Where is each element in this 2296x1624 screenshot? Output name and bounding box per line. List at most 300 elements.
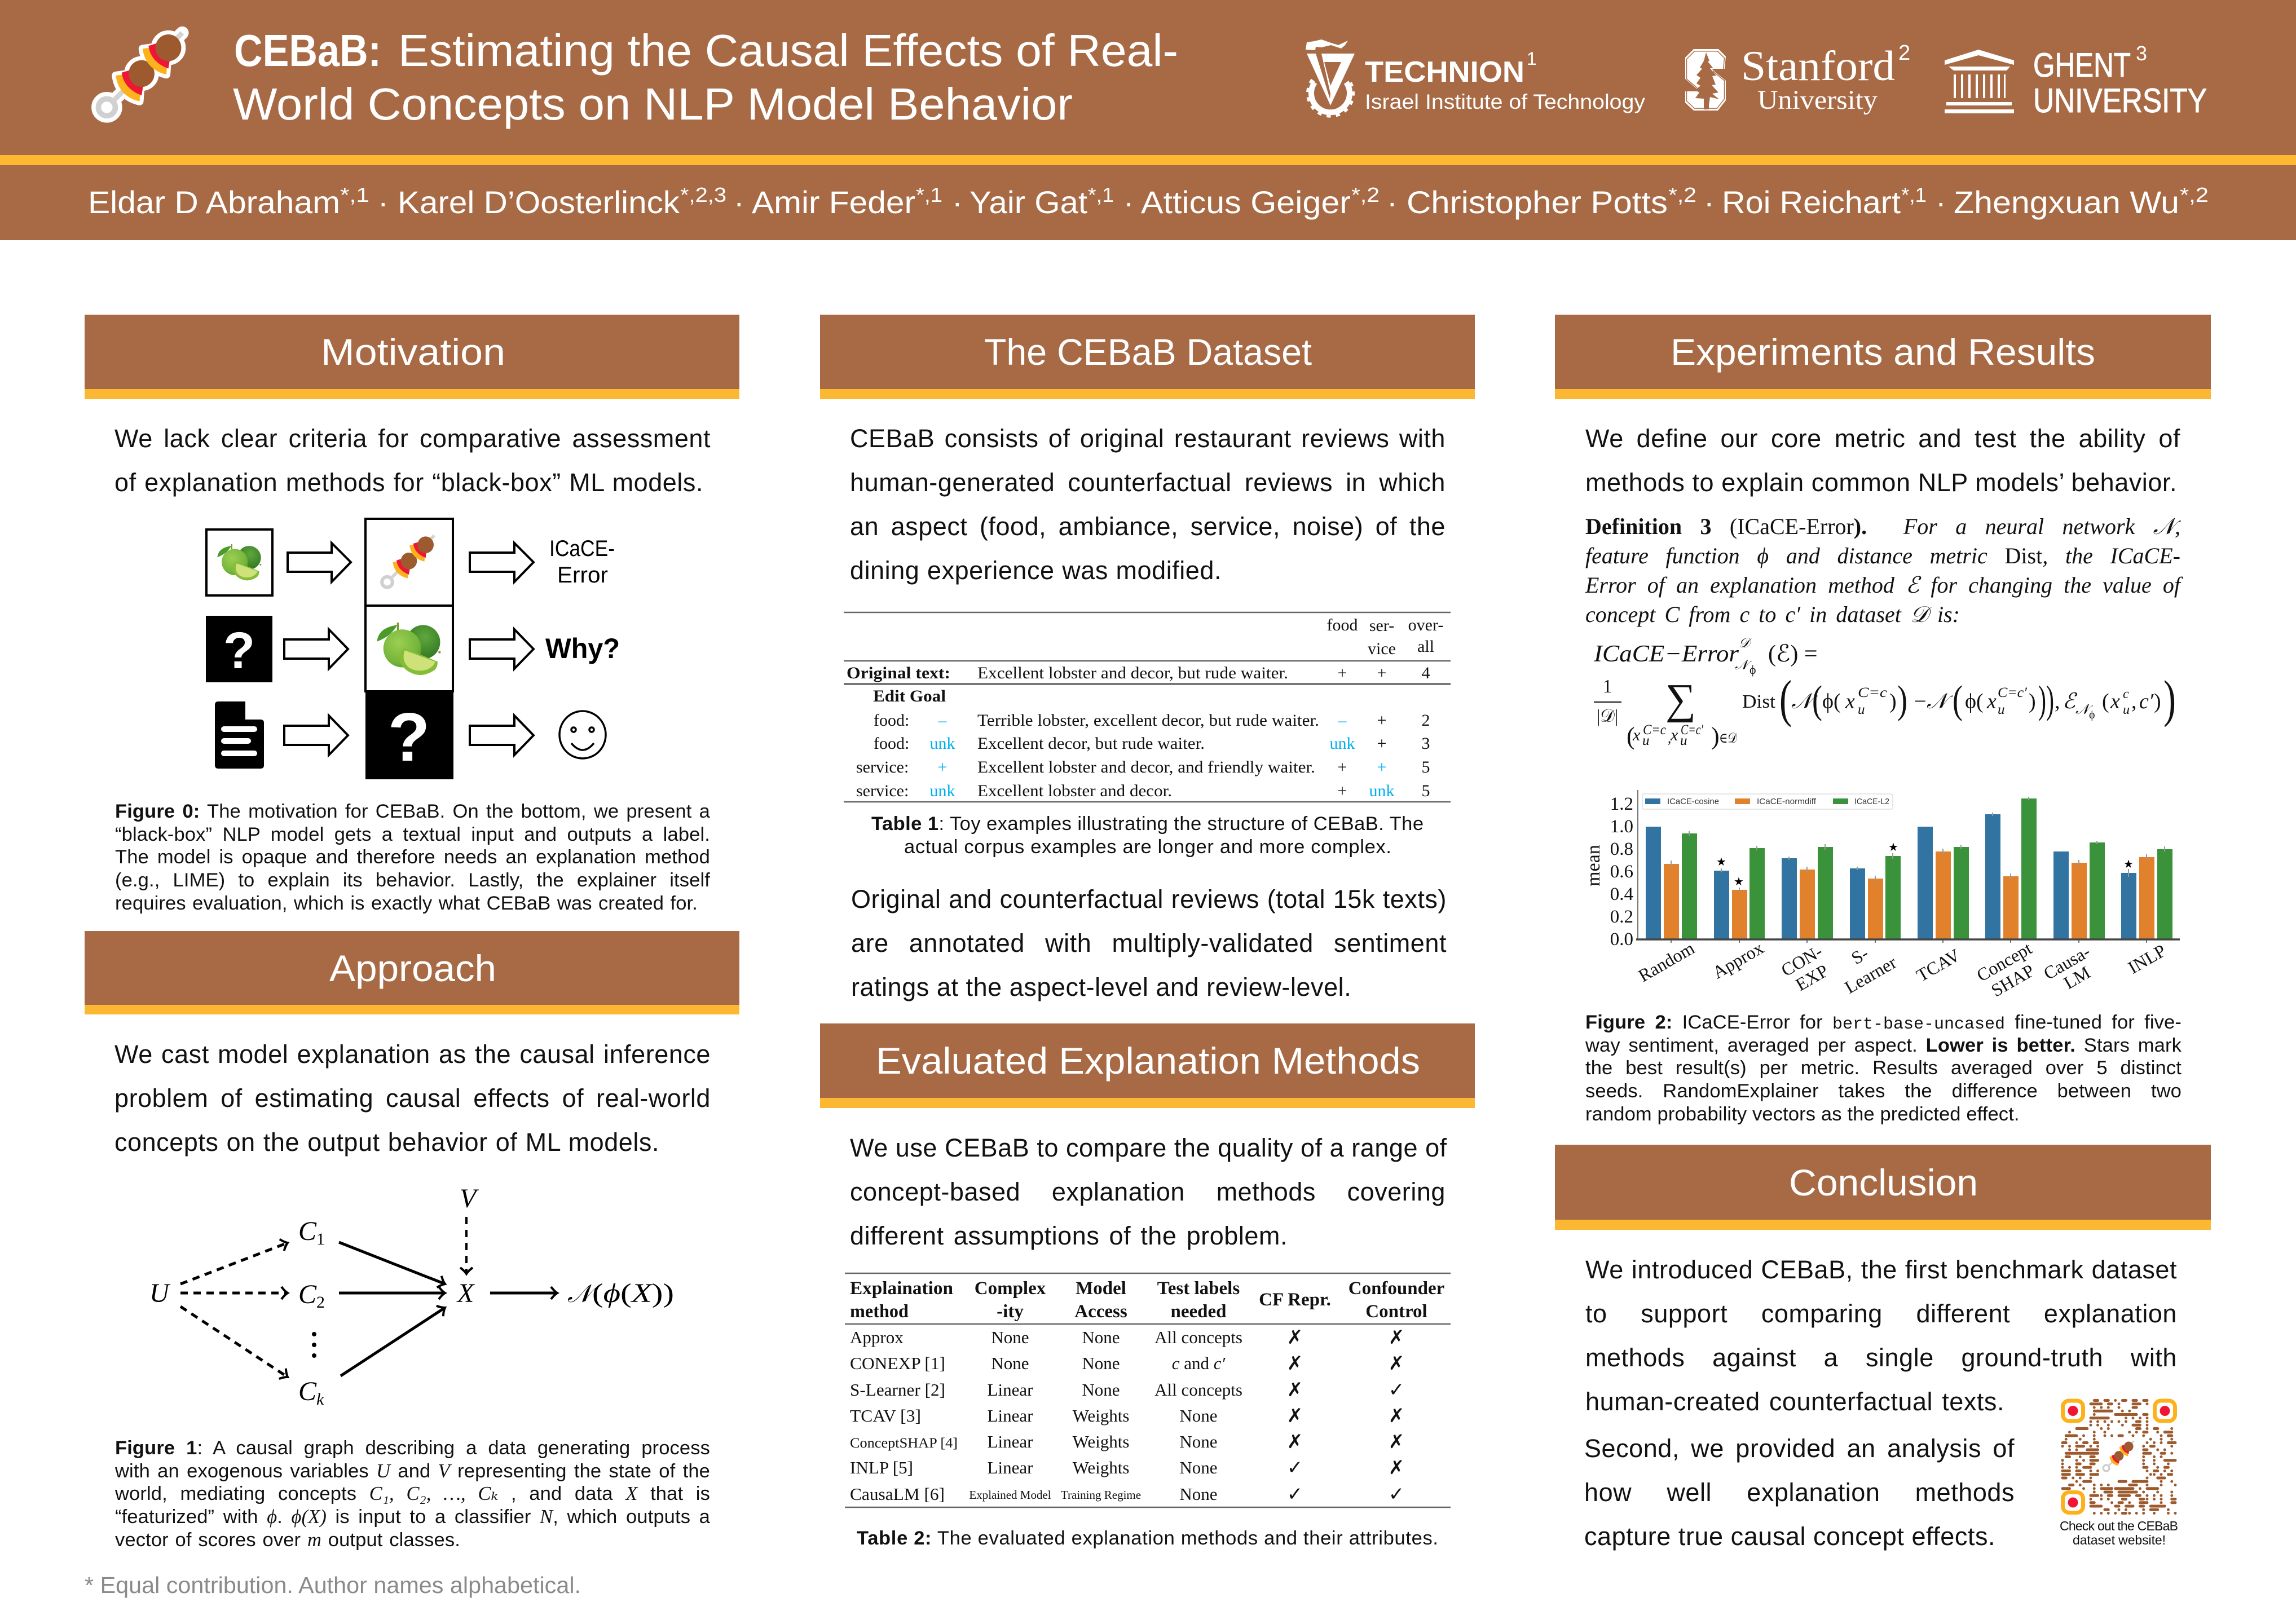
formula body: 𝒩	[1791, 690, 1818, 713]
y-axis ticks: 1.0	[1610, 817, 1633, 837]
table 2 attribute columns: Training Regime	[1061, 1488, 1141, 1502]
logo: Stanford	[1685, 41, 1910, 115]
text: experiments intro: methods to explain common NLP models’ behavior.	[1585, 468, 2177, 497]
heading: The CEBaB Dataset: The CEBaB Dataset	[984, 331, 1312, 373]
table 2 check marks: ✗	[1287, 1326, 1303, 1349]
table 2 header: CF Repr.	[1259, 1290, 1331, 1310]
icon: lime input	[206, 529, 272, 595]
text: dataset annotation: ratings at the aspect-level and review-level.	[851, 973, 1351, 1001]
icon: black box model	[365, 691, 453, 779]
table 2 check marks: ✗	[1287, 1352, 1303, 1375]
table 1 edit goal rows: Excellent lobster and decor.	[977, 782, 1172, 800]
x-axis labels: LM	[2060, 962, 2094, 993]
authors band: ·	[1704, 184, 1715, 220]
table 1 edit goal rows: Excellent lobster and decor, and friendly waiter.	[977, 758, 1315, 776]
text: approach	[114, 1040, 711, 1157]
icon: lime box	[365, 606, 453, 691]
table 2 header: Complex	[975, 1278, 1046, 1299]
text: dataset description: an aspect (food, ambiance, service, noise) of the	[850, 512, 1446, 541]
table 1 original row	[847, 664, 1430, 682]
x-axis labels: EXP	[1792, 960, 1832, 995]
formula body: (	[2102, 690, 2109, 713]
table 2 attribute columns: None	[1082, 1327, 1120, 1347]
formula body: ,	[2055, 690, 2060, 713]
table 2 check marks: ✓	[1287, 1457, 1303, 1479]
table 2 attribute columns: None	[1082, 1380, 1120, 1400]
formula: ICaCE-Error	[1593, 636, 2176, 750]
table 2 check marks	[1287, 1326, 1404, 1506]
formula body: ϕ	[2089, 709, 2095, 721]
icon: smiley	[559, 711, 606, 758]
table 2 header: Model	[1076, 1278, 1126, 1299]
QR modules	[2063, 1401, 2175, 1513]
caption: figure 1: vector of scores over m output classes.	[115, 1529, 460, 1551]
graph nodes: 𝒩	[567, 1280, 598, 1308]
table 2 attribute columns: Explained Model	[969, 1488, 1051, 1502]
formula sum range: ∈𝒟	[1719, 731, 1737, 746]
formula sum range: ,	[1668, 731, 1671, 746]
table 1 original row: +	[1338, 664, 1347, 682]
text: conclusion second: Second, we provided an analysis of	[1584, 1434, 2015, 1463]
authors band: *,1	[340, 183, 369, 206]
authors band: *,2	[1351, 183, 1380, 206]
text: conclusion first: We introduced CEBaB, the first benchmark dataset	[1585, 1255, 2177, 1284]
caption: figure 2: way sentiment, averaged per aspect. Lower is better. Stars mark	[1585, 1035, 2182, 1056]
table 1 edit goal rows: 5	[1421, 782, 1430, 800]
table 2 attribute columns: None	[1179, 1458, 1218, 1477]
table 2 check marks: ✗	[1389, 1431, 1404, 1453]
table 2 attribute columns: Linear	[988, 1458, 1033, 1477]
formula body: )	[1889, 690, 1897, 713]
x-axis labels: SHAP	[1987, 960, 2038, 1001]
table 2 header: needed	[1171, 1301, 1226, 1322]
table 2 attribute columns: c and c′	[1172, 1353, 1226, 1373]
authors band: *,2,3	[680, 183, 726, 206]
icon: document	[215, 701, 264, 769]
table 2 attribute columns: Weights	[1073, 1458, 1129, 1477]
caption: figure 1: “featurized” with ϕ. ϕ(X) is input to a classifier N, which outputs a	[115, 1506, 710, 1528]
text: conclusion first: methods against a single ground-truth with	[1585, 1343, 2177, 1372]
formula body: (	[1812, 678, 1822, 722]
title: Estimating the Causal Effects of Real-	[398, 25, 1178, 76]
heading: Motivation: Motivation	[321, 331, 505, 373]
formula body	[1742, 670, 2176, 727]
bars: S-Learner	[1850, 856, 1901, 939]
y-axis label: mean	[1583, 845, 1604, 886]
table 2 caption: Table 2: The evaluated explanation methods and their attributes.	[857, 1528, 1438, 1549]
chart axes	[1636, 790, 2180, 943]
stars: best results	[1716, 840, 2134, 888]
authors band: *,1	[1901, 183, 1927, 206]
formula body: )	[2154, 690, 2161, 713]
title: World Concepts on NLP Model Behavior	[233, 79, 1073, 129]
formula body: c	[2123, 687, 2129, 701]
footnote: * Equal contribution. Author names alphabetical.	[85, 1572, 581, 1598]
y-axis ticks	[1610, 794, 1633, 950]
graph nodes: X	[456, 1278, 475, 1308]
table 2 check marks: ✗	[1287, 1379, 1303, 1401]
table 2 method column: TCAV [3]	[850, 1406, 921, 1426]
table 2 method column: CONEXP [1]	[850, 1353, 945, 1373]
formula first line: 𝒟	[1739, 636, 1752, 651]
caption: figure 0: “black-box” NLP model gets a textual input and outputs a label.	[115, 824, 710, 845]
icon: kebab in QR	[2102, 1441, 2134, 1472]
icon: black box row two	[206, 616, 272, 682]
y-axis ticks: 0.8	[1610, 839, 1633, 859]
x-axis labels: CON-	[1778, 941, 1826, 981]
formula fraction: 1	[1603, 676, 1612, 697]
authors band: ·	[952, 184, 963, 220]
table 2 header: Access	[1074, 1301, 1127, 1322]
table 2 check marks: ✗	[1389, 1457, 1404, 1479]
authors band: Zhengxuan Wu	[1954, 184, 2179, 220]
text: conclusion second: capture true causal concept effects.	[1584, 1522, 1995, 1551]
text: conclusion first: human-created counterfactual texts.	[1585, 1387, 2004, 1416]
logo: Ghent University: UNIVERSITY	[2033, 82, 2207, 120]
text: approach: concepts on the output behavior of ML models.	[114, 1128, 659, 1157]
chart legend: ICaCE-cosine	[1667, 797, 1719, 806]
table 1 original row: +	[1377, 664, 1386, 682]
x-axis labels: S-	[1848, 943, 1872, 968]
text: conclusion second	[1584, 1434, 2015, 1551]
authors band: Amir Feder	[752, 184, 915, 220]
table 2 header	[850, 1278, 1444, 1322]
table 1 edit goal rows	[856, 687, 1430, 800]
title	[233, 25, 1178, 129]
formula first line: 𝒩	[1735, 658, 1752, 673]
text: conclusion first	[1585, 1255, 2177, 1416]
logo: Ghent University	[1945, 42, 2207, 120]
heading: Experiments and Results: Experiments and Results	[1671, 331, 2095, 373]
formula body: (	[1779, 670, 1792, 727]
table 2 header: method	[850, 1301, 909, 1322]
text: motivation intro: We lack clear criteria for comparative assessment	[114, 424, 711, 453]
text: evaluated methods	[850, 1133, 1447, 1250]
heading: Conclusion	[1555, 1145, 2211, 1230]
figure 1: causal graph	[149, 1184, 674, 1409]
text: definition 3: feature function ϕ and distance metric Dist, the ICaCE-	[1585, 543, 2180, 568]
text: motivation intro	[114, 424, 711, 497]
formula first line: ICaCE−Error	[1593, 641, 1739, 667]
heading: Evaluated Explanation Methods	[820, 1023, 1475, 1108]
table 2 attribute columns: Linear	[988, 1406, 1033, 1426]
table 2 check marks: ✗	[1287, 1405, 1303, 1427]
graph nodes: C	[298, 1279, 317, 1309]
logo: Technion: Israel Institute of Technology	[1365, 90, 1646, 113]
formula body: )	[1897, 678, 1907, 722]
x-axis labels: Causa-	[2040, 941, 2094, 983]
text: dataset annotation: are annotated with multiply-validated sentiment	[851, 929, 1447, 957]
caption: figure 1: with an exogenous variables U and V representing the state of the	[115, 1460, 710, 1482]
text: approach: We cast model explanation as the causal inference	[114, 1040, 711, 1069]
formula body: u	[1858, 702, 1865, 717]
formula body: u	[1998, 702, 2004, 717]
logo: Technion: 1	[1527, 48, 1537, 69]
authors band: Eldar D Abraham	[88, 184, 340, 220]
caption: figure 0: The model is opaque and therefore needs an explanation method	[115, 846, 710, 868]
text: definition 3: Error of an explanation method ℰ for changing the value of	[1585, 572, 2180, 598]
caption: figure 2: Figure 2: ICaCE-Error for bert-base-uncased fine-tuned for five-	[1585, 1012, 2182, 1034]
x-axis labels: TCAV	[1913, 945, 1963, 986]
formula sum range: C=c′	[1681, 722, 1703, 738]
icon: black box model: ?	[388, 699, 430, 775]
table 1 header: over-	[1408, 616, 1443, 634]
formula body: u	[2123, 703, 2130, 717]
table 2 method column: CausaLM [6]	[850, 1484, 945, 1504]
formula body: x	[1986, 690, 1997, 713]
formula sum range: u	[1642, 733, 1649, 748]
text: evaluated methods: We use CEBaB to compare the quality of a range of	[850, 1133, 1447, 1162]
table 2 attribute columns: None	[1179, 1432, 1218, 1451]
table 2 method column: ConceptSHAP [4]	[850, 1436, 958, 1451]
logo: Technion	[1306, 39, 1646, 116]
label: ICaCE-Error	[549, 536, 615, 588]
table 2 attribute columns: None	[991, 1327, 1029, 1347]
authors band: ·	[1936, 184, 1946, 220]
caption: figure 2: seeds. RandomExplainer takes the difference between two	[1585, 1080, 2182, 1102]
text: definition 3: concept C from c to c′ in dataset 𝒟 is:	[1585, 602, 1960, 627]
stars: best results: ★	[2123, 857, 2134, 871]
logo: Stanford: Stanford	[1741, 43, 1895, 90]
logo: Stanford: University	[1757, 85, 1878, 115]
formula sum range: )	[1711, 722, 1720, 750]
heading: Approach: Approach	[329, 947, 496, 989]
table 2 attribute columns: All concepts	[1154, 1380, 1242, 1400]
table 2 attribute columns	[969, 1327, 1242, 1504]
bars: Random	[1646, 827, 1697, 939]
formula sum: ∑	[1665, 676, 1696, 723]
bars: CON-EXP	[1782, 847, 1833, 939]
authors band: *,2	[2180, 183, 2209, 206]
table 2	[845, 1273, 1451, 1507]
formula sum range: x	[1632, 726, 1641, 744]
y-axis ticks: 0.6	[1610, 862, 1633, 882]
table 2 header: Test labels	[1157, 1278, 1240, 1299]
table 1 edit goal rows: unk	[1369, 782, 1394, 800]
formula fraction: |𝒟|	[1597, 705, 1618, 726]
authors band: Roi Reichart	[1722, 184, 1901, 220]
graph nodes: C	[298, 1216, 317, 1246]
authors band: Karel D’Oosterlinck	[398, 184, 680, 220]
chart legend	[1642, 794, 1893, 809]
table 1 edit goal rows: Edit Goal	[873, 687, 946, 705]
logo: Ghent University: GHENT	[2033, 46, 2131, 84]
icon: black box row two: ?	[223, 622, 255, 679]
caption: figure 1: world, mediating concepts C₁, C₂, …, Cₖ , and data X that is	[115, 1483, 710, 1504]
table 2 check marks: ✗	[1389, 1326, 1404, 1349]
chart legend: ICaCE-L2	[1854, 797, 1889, 806]
formula body: C=c′	[1998, 685, 2028, 700]
table 2 check marks: ✗	[1389, 1405, 1404, 1427]
authors band: ·	[1123, 184, 1134, 220]
formula first line: (ℰ) =	[1768, 641, 1818, 667]
label: ICaCE-Error: ICaCE-	[549, 536, 615, 561]
table 1 edit goal rows: –	[937, 711, 948, 730]
table 1 edit goal rows: food:	[874, 711, 909, 730]
table 1 edit goal rows: Terrible lobster, excellent decor, but rude waiter.	[977, 711, 1319, 730]
stars: best results: ★	[1734, 875, 1744, 888]
table 1 edit goal rows: unk	[929, 782, 955, 800]
authors band: ·	[734, 184, 744, 220]
table 1 edit goal rows: service:	[856, 758, 909, 776]
authors band: *,1	[916, 183, 942, 206]
formula sum range	[1627, 722, 1737, 750]
text: definition 3: Definition 3 (ICaCE-Error). For a neural network 𝒩,	[1585, 514, 2180, 539]
authors band: *,1	[1088, 183, 1114, 206]
graph nodes: k	[316, 1390, 324, 1409]
table 2 header: Explaination	[850, 1278, 953, 1299]
table 2 method column: Approx	[850, 1327, 904, 1347]
text: definition 3	[1585, 514, 2183, 627]
graph nodes: V	[460, 1184, 479, 1213]
text: approach: problem of estimating causal effects of real-world	[114, 1084, 711, 1113]
formula body: ,	[2131, 690, 2136, 713]
label: Why?: Why?	[545, 633, 620, 664]
formula sum range: x	[1670, 726, 1678, 744]
table 2 attribute columns: None	[1179, 1484, 1218, 1504]
caption: figure 0: requires evaluation, which is exactly what CEBaB was created for.	[115, 893, 698, 914]
table 1 edit goal rows: 2	[1421, 711, 1430, 730]
table 1 original row: 4	[1421, 664, 1430, 682]
table 1 caption: actual corpus examples are longer and more complex.	[904, 836, 1391, 858]
arrows	[284, 543, 534, 755]
table 2 check marks: ✓	[1287, 1483, 1303, 1506]
table 2 method column	[850, 1327, 958, 1504]
formula body: )	[2029, 690, 2036, 713]
authors band: ·	[1387, 184, 1398, 220]
icon: kebab logo	[95, 33, 182, 119]
formula body: ϕ(	[1965, 690, 1984, 713]
formula body: ))	[2038, 678, 2054, 722]
table 1 caption: Table 1: Toy examples illustrating the structure of CEBaB. The	[871, 813, 1424, 835]
graph arrows	[180, 1217, 557, 1377]
table 1 edit goal rows: +	[938, 758, 947, 776]
heading: Evaluated Explanation Methods: Evaluated Explanation Methods	[876, 1040, 1420, 1082]
table 2 method column: S-Learner [2]	[850, 1380, 945, 1400]
text: dataset description: dining experience was modified.	[850, 556, 1222, 585]
graph nodes: U	[149, 1278, 171, 1308]
text: experiments intro	[1585, 424, 2180, 497]
formula body: 𝒩	[2075, 702, 2093, 717]
x-axis labels: Random	[1635, 938, 1698, 986]
table 1 original row: Original text:	[847, 664, 950, 682]
text: dataset description: human-generated counterfactual reviews in which	[850, 468, 1446, 497]
x-axis labels: INLP	[2125, 940, 2169, 978]
text: dataset annotation: Original and counterfactual reviews (total 15k texts)	[851, 885, 1447, 914]
table 1 edit goal rows: unk	[1330, 734, 1355, 753]
table 1 header: vice	[1368, 639, 1396, 658]
table 2 header: Control	[1365, 1301, 1427, 1322]
formula first line	[1593, 636, 1818, 677]
graph nodes: 2	[316, 1293, 325, 1312]
table 1 edit goal rows: 3	[1421, 734, 1430, 753]
table 2 check marks: ✗	[1389, 1352, 1404, 1375]
table 1 edit goal rows: +	[1338, 782, 1347, 800]
table 2 header: Confounder	[1348, 1278, 1444, 1299]
label: ICaCE-Error: Error	[557, 563, 608, 588]
table 1 edit goal rows: Excellent decor, but rude waiter.	[977, 734, 1205, 753]
formula body: )	[2163, 670, 2176, 727]
caption: figure 0: (e.g., LIME) to explain its behavior. Lastly, the explainer itself	[115, 870, 710, 891]
table 2 attribute columns: None	[991, 1353, 1029, 1373]
QR caption	[2060, 1519, 2178, 1547]
x-axis labels	[1635, 937, 2169, 1001]
table 2 attribute columns: Linear	[988, 1432, 1033, 1451]
table 2 attribute columns: Weights	[1073, 1406, 1129, 1426]
table 1 edit goal rows: service:	[856, 782, 909, 800]
formula body: Dist	[1742, 691, 1776, 712]
formula sum range: (	[1627, 722, 1635, 750]
caption: figure 0	[115, 801, 710, 914]
bars: Causa-LM	[2053, 842, 2105, 939]
text: dataset description: CEBaB consists of original restaurant reviews with	[850, 424, 1446, 453]
table 1 edit goal rows: +	[1338, 758, 1347, 776]
heading: Approach	[85, 931, 739, 1014]
logo: Technion: TECHNION	[1365, 56, 1524, 89]
formula sum range: u	[1680, 733, 1687, 748]
heading: Conclusion: Conclusion	[1789, 1162, 1978, 1203]
chart legend: ICaCE-normdiff	[1757, 797, 1817, 806]
formula body: c′	[2139, 690, 2154, 713]
table 2 check marks: ✓	[1389, 1483, 1404, 1506]
formula body: (	[1953, 678, 1963, 722]
y-axis ticks: 0.2	[1610, 907, 1633, 927]
QR caption: dataset website!	[2073, 1533, 2166, 1547]
table 1 edit goal rows: unk	[929, 734, 955, 753]
caption: figure 1	[115, 1437, 710, 1551]
graph nodes: (ϕ(X))	[592, 1278, 674, 1308]
QR finder patterns	[2063, 1401, 2175, 1512]
authors band: Yair Gat	[969, 184, 1087, 220]
text: evaluated methods: concept-based explanation methods covering	[850, 1177, 1446, 1206]
table 1 edit goal rows: +	[1377, 711, 1386, 730]
formula body: x	[2110, 690, 2120, 713]
caption: figure 2: random probability vectors as the predicted effect.	[1585, 1104, 2020, 1125]
table 1 edit goal rows: –	[1338, 711, 1347, 730]
title: CEBaB:	[234, 25, 381, 76]
text: conclusion first: to support comparing different explanation	[1585, 1299, 2177, 1328]
table 1 edit goal rows: food:	[874, 734, 909, 753]
y-axis ticks: 1.2	[1610, 794, 1633, 814]
QR code	[2060, 1401, 2178, 1547]
table 2 check marks: ✓	[1389, 1379, 1404, 1401]
bars: Approx	[1714, 848, 1765, 939]
authors band: ·	[378, 184, 389, 220]
header band: title	[0, 0, 2296, 155]
formula body: C=c	[1858, 685, 1887, 700]
bars: TCAV	[1918, 827, 1969, 939]
table 1 original row: Excellent lobster and decor, but rude waiter.	[977, 664, 1288, 682]
table 1 edit goal rows: +	[1377, 758, 1386, 776]
table 1 header: ser-	[1369, 616, 1394, 635]
text: evaluated methods: different assumptions of the problem.	[850, 1221, 1288, 1250]
stars: best results: ★	[1888, 840, 1898, 854]
authors band: *,2	[1668, 183, 1696, 206]
bars: INLP	[2121, 849, 2172, 939]
text: conclusion second: how well explanation methods	[1584, 1478, 2015, 1507]
heading: The CEBaB Dataset	[820, 315, 1475, 399]
table 1 edit goal rows: +	[1377, 734, 1386, 753]
authors band: Christopher Potts	[1407, 184, 1668, 220]
graph nodes: C	[298, 1376, 317, 1406]
table 2 attribute columns: None	[1179, 1406, 1218, 1426]
authors band	[0, 165, 2296, 240]
stars: best results: ★	[1716, 855, 1726, 868]
x-axis labels: Approx	[1709, 937, 1767, 983]
table 2 attribute columns: All concepts	[1154, 1327, 1242, 1347]
table 2 check marks: ✗	[1287, 1431, 1303, 1453]
formula body: x	[1845, 690, 1855, 713]
